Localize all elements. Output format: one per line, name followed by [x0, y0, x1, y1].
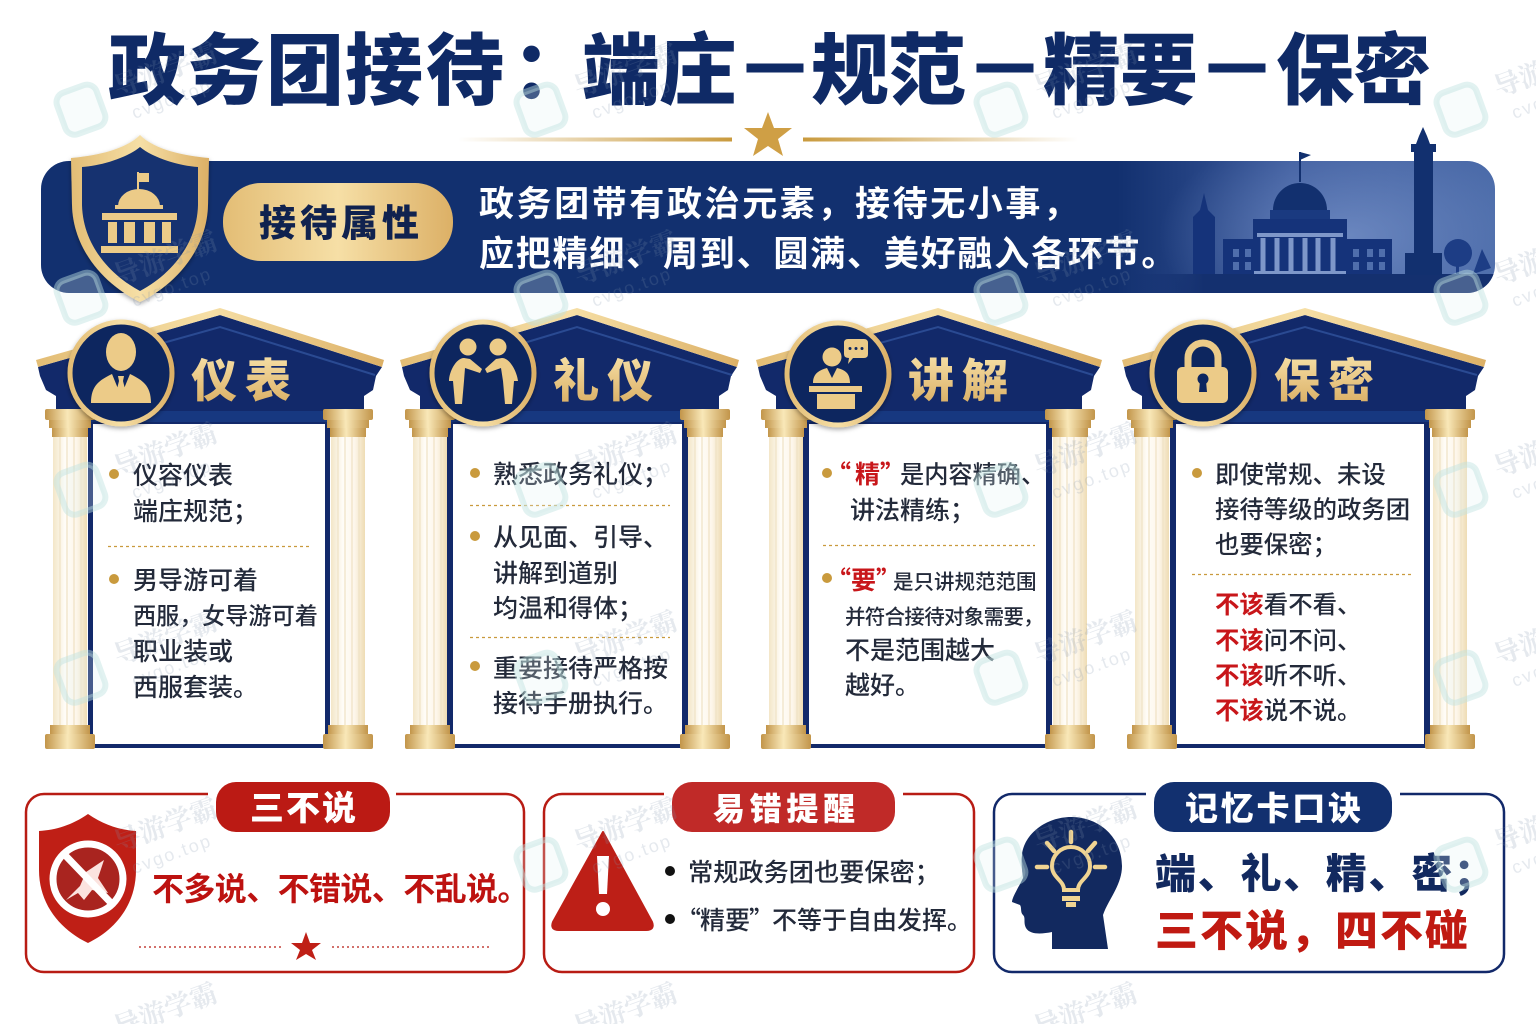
- 记忆卡口诀 tab: [1154, 782, 1392, 832]
- 仪表 heading: 仪表: [191, 355, 299, 407]
- watermark: 导游学霸: [570, 418, 681, 483]
- callout: 易错提醒: [544, 782, 974, 972]
- 礼仪 icon: handshake: [432, 322, 534, 424]
- watermark: 导游学霸: [110, 606, 221, 671]
- 仪表 text: 端庄规范；: [133, 498, 258, 526]
- 仪表 text: [108, 462, 318, 702]
- title divider with star: [458, 112, 1078, 156]
- star divider: [139, 932, 492, 960]
- watermark: cvgo.top: [589, 455, 675, 503]
- watermark: 导游学霸: [1030, 226, 1141, 291]
- watermark: 导游学霸: [1030, 38, 1141, 103]
- 礼仪 text: 均温和得体；: [493, 595, 643, 623]
- title: —: [745, 22, 805, 109]
- 讲解 text: “精”: [826, 455, 905, 491]
- watermark: cvgo.top: [1049, 455, 1135, 503]
- 保密 text: 不该说不说。: [1215, 698, 1361, 725]
- 讲解 text: 讲法精练；: [850, 497, 975, 525]
- watermark: cvgo.top: [589, 643, 675, 691]
- 记忆卡口诀 text: 三不说，四不碰: [1155, 908, 1470, 956]
- panel: 讲解: [756, 308, 1102, 749]
- 讲解 text: 并符合接待对象需要，: [845, 606, 1043, 629]
- watermark: 导游学霸: [570, 226, 681, 291]
- banner text: [479, 185, 1178, 274]
- attribute pill: 接待属性: [259, 203, 419, 244]
- 讲解 text: [822, 455, 1045, 700]
- banner: reception attributes: [41, 127, 1495, 293]
- panel: 保密: [1122, 308, 1486, 749]
- 易错提醒 tab: [672, 782, 895, 832]
- 保密 text: 接待等级的政务团: [1215, 497, 1410, 524]
- watermark: 导游学霸: [1030, 793, 1141, 858]
- 保密 text: 不该问不问、: [1215, 628, 1361, 655]
- 易错提醒 tab: 易错提醒: [713, 791, 855, 827]
- banner text: 政务团带有政治元素，接待无小事，: [479, 185, 1081, 224]
- watermark: cvgo.top: [589, 75, 675, 123]
- 礼仪 heading: 礼仪: [553, 355, 661, 407]
- attribute pill: [223, 183, 453, 261]
- watermark: 导游学霸: [570, 606, 681, 671]
- 仪表 text: 西服，: [133, 603, 203, 629]
- banner skyline: [1193, 127, 1491, 275]
- watermark: cvgo.top: [1049, 263, 1135, 311]
- watermark: 导游学霸: [110, 226, 221, 291]
- watermark: 导游学霸: [110, 793, 221, 858]
- 礼仪 text: 熟悉政务礼仪；: [493, 461, 668, 489]
- 礼仪 text: [470, 461, 670, 718]
- panel: 仪表: [36, 308, 384, 749]
- title: 精要: [1043, 27, 1198, 115]
- 保密 text: [1192, 462, 1413, 725]
- watermark: 导游学霸: [110, 418, 221, 483]
- watermark: cvgo.top: [129, 75, 215, 123]
- 易错提醒 text: [665, 859, 972, 937]
- watermark: cvgo.top: [129, 643, 215, 691]
- title: 端庄: [582, 27, 737, 115]
- watermark: cvgo.top: [129, 455, 215, 503]
- 礼仪 text: 接待手册执行。: [493, 690, 668, 718]
- title: 政务团接待：: [108, 27, 590, 115]
- 三不说 text: 不多说、不错说、不乱说。: [152, 871, 529, 907]
- 仪表 text: 仪容仪表: [133, 462, 233, 490]
- 礼仪 text: 从见面、引导、: [493, 524, 668, 552]
- banner text: 应把精细、周到、圆满、美好融入各环节。: [479, 235, 1178, 274]
- 保密 text: 即使常规、未设: [1215, 462, 1386, 489]
- 保密 text: 也要保密；: [1215, 532, 1337, 559]
- 仪表 text: 西服套装。: [133, 674, 258, 702]
- watermark: 导游学霸: [570, 793, 681, 858]
- 易错提醒 text: “精要”: [676, 901, 774, 937]
- 记忆卡口诀 text: 端、礼、精、密；: [1155, 851, 1497, 897]
- 讲解 text: 是只讲规范范围: [893, 571, 1036, 594]
- panel: 礼仪: [400, 308, 739, 749]
- 三不说 tab: 三不说: [250, 790, 356, 828]
- 讲解 text: “要”: [826, 561, 901, 597]
- 易错提醒 text: 常规政务团也要保密；: [688, 859, 940, 887]
- 保密 temple header: [1122, 308, 1486, 422]
- callout: 三不说: [26, 782, 529, 972]
- watermark: cvgo.top: [1049, 830, 1135, 878]
- title: 保密: [1276, 27, 1431, 115]
- 记忆卡口诀 tab: 记忆卡口诀: [1185, 790, 1361, 827]
- 保密 heading: 保密: [1274, 355, 1382, 407]
- 讲解 text: 越好。: [845, 672, 920, 700]
- watermark: cvgo.top: [1049, 75, 1135, 123]
- 仪表 text: 男导游可着: [133, 567, 258, 595]
- icon: warning triangle: [552, 832, 653, 930]
- 保密 text: 不该看不看、: [1215, 592, 1361, 619]
- 仪表 temple header: [36, 308, 384, 422]
- watermark: 导游学霸: [1030, 606, 1141, 671]
- title: —: [1207, 22, 1267, 109]
- watermark: 导游学霸: [570, 38, 681, 103]
- 礼仪 text: 重要接待严格按: [493, 655, 668, 683]
- watermark: cvgo.top: [589, 830, 675, 878]
- 讲解 heading: 讲解: [908, 355, 1016, 407]
- watermark: cvgo.top: [589, 263, 675, 311]
- callout: 记忆卡口诀: [994, 782, 1504, 972]
- 保密 text: 不该听不听、: [1215, 663, 1361, 690]
- watermark: cvgo.top: [1049, 643, 1135, 691]
- 三不说 tab: [216, 782, 390, 832]
- 仪表 text: 女导游可着: [202, 603, 318, 629]
- watermark: 导游学霸: [1030, 418, 1141, 483]
- icon: head with light bulb: [1012, 817, 1122, 949]
- 仪表 text: 职业装或: [133, 638, 233, 666]
- 讲解 text: 不是范围越大: [845, 637, 995, 665]
- icon: no-speaking shield: [39, 814, 136, 943]
- title: —: [975, 22, 1035, 109]
- shield icon: government building: [71, 135, 209, 302]
- 讲解 temple header: [756, 308, 1102, 422]
- 礼仪 temple header: [400, 308, 739, 422]
- 讲解 icon: speaker at podium: [787, 323, 889, 425]
- 记忆卡口诀 text: [1155, 851, 1497, 956]
- watermark: cvgo.top: [129, 830, 215, 878]
- watermark: 导游学霸: [110, 38, 221, 103]
- title: 规范: [811, 27, 966, 115]
- watermark: cvgo.top: [129, 263, 215, 311]
- 仪表 icon: person: [70, 322, 172, 424]
- 保密 icon: padlock: [1152, 322, 1254, 424]
- 易错提醒 text: 不等于自由发挥。: [772, 907, 972, 935]
- 讲解 text: 是内容精确、: [900, 462, 1045, 489]
- 礼仪 text: 讲解到道别: [493, 560, 618, 588]
